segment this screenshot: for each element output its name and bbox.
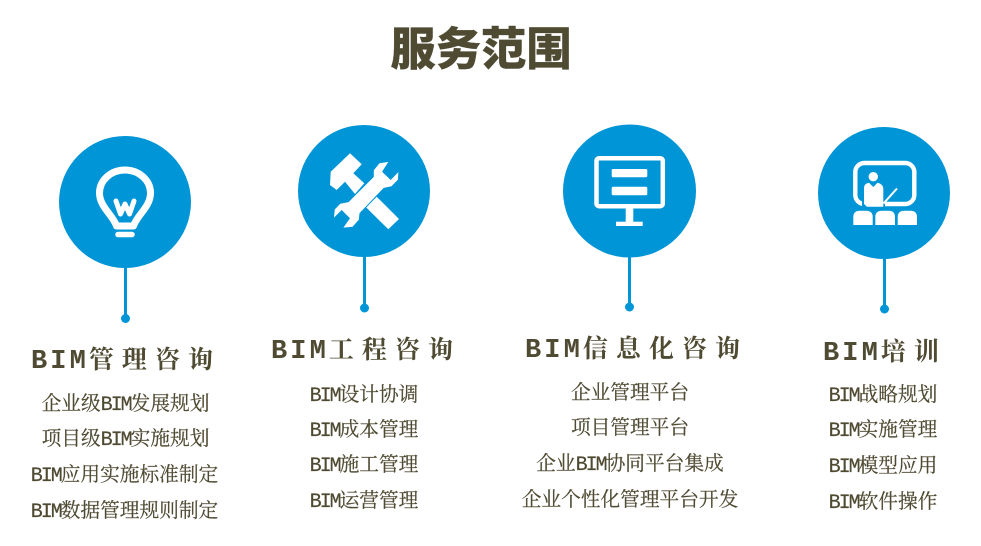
panel: BIM管理咨询: [31, 136, 221, 524]
circle badge: [818, 127, 950, 259]
service list: [31, 393, 218, 524]
service list: BIM实施管理: [829, 419, 938, 443]
service list: BIM成本管理: [310, 419, 419, 443]
service list: 企业个性化管理平台开发: [522, 489, 738, 511]
service list: 企业BIM协同平台集成: [536, 453, 724, 477]
service list: 企业级BIM发展规划: [42, 393, 209, 417]
circle badge: [298, 125, 430, 257]
title: 服务范围: [390, 13, 572, 79]
icon: light bulb: [100, 170, 150, 234]
heading: BIM培训: [823, 338, 947, 369]
panel: BIM信息化咨询: [522, 124, 748, 511]
pin connector: [625, 252, 634, 312]
icon: hammer and wrench: [330, 153, 399, 229]
service list: BIM运营管理: [310, 490, 419, 514]
service list: BIM设计协调: [310, 384, 418, 408]
heading: BIM信息化咨询: [525, 335, 748, 366]
service list: BIM软件操作: [829, 491, 937, 515]
pin connector: [360, 252, 369, 312]
service list: BIM数据管理规则制定: [31, 500, 218, 524]
heading: BIM工程咨询: [271, 336, 461, 367]
circle badge: [59, 136, 191, 268]
icon: monitor: [596, 158, 663, 226]
service list: 项目级BIM实施规划: [42, 428, 209, 452]
heading: BIM管理咨询: [31, 346, 221, 377]
panel: BIM培训: [818, 127, 950, 515]
panel: BIM工程咨询: [271, 125, 461, 514]
service list: 企业管理平台: [571, 382, 689, 404]
icon: teacher at board: [853, 163, 917, 225]
service list: 项目管理平台: [571, 417, 689, 439]
service list: [522, 382, 738, 511]
service list: BIM施工管理: [310, 454, 419, 478]
service list: BIM模型应用: [829, 455, 937, 479]
service list: BIM应用实施标准制定: [31, 464, 218, 488]
service list: BIM战略规划: [829, 384, 937, 408]
pin connector: [880, 254, 889, 314]
service list: [310, 384, 419, 514]
service list: [829, 384, 938, 515]
pin connector: [121, 262, 130, 323]
circle badge: [563, 124, 696, 258]
